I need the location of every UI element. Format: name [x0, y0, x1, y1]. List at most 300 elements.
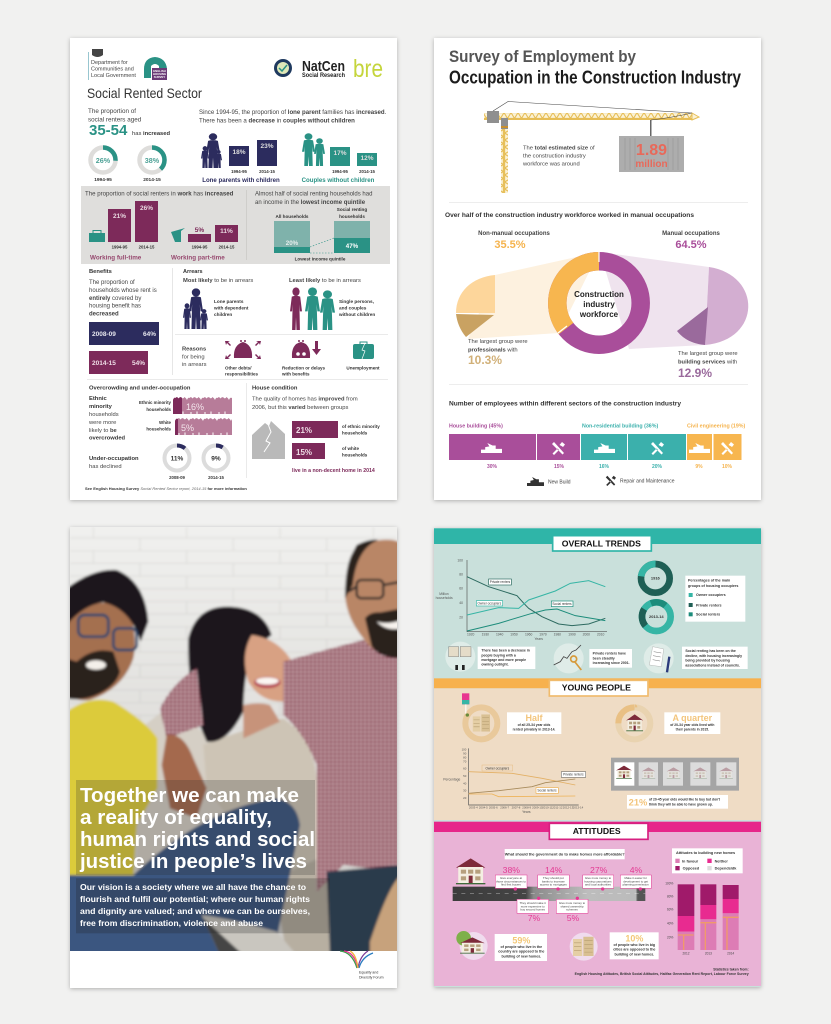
line chart: young people's tenure: Percentage [443, 777, 460, 781]
section: reasons for being in arrears: for being [182, 354, 205, 360]
chart: left fan [456, 252, 599, 339]
vision statement: Our vision is a society where we all have the chance to [80, 882, 306, 892]
line chart: housing tenure trends: households [436, 596, 453, 600]
text: income heading: Almost half of social renting households had [255, 192, 372, 198]
line chart: young people's tenure: 2004-5 [479, 806, 488, 810]
bar chart: lone parents with children: Lone parents with children [202, 177, 280, 184]
bar chart: working part-time: 2014-15 [219, 244, 235, 250]
bar chart: couples without children: 17% [333, 150, 347, 157]
line chart: young people's tenure: 2010-11 [542, 806, 553, 810]
section: benefits: entirely covered by [89, 296, 141, 302]
text: lone parents with dependent children [213, 299, 249, 317]
headline [79, 784, 315, 873]
section: house condition: of ethnic minority [342, 424, 380, 429]
bar chart: couples without children: 1994-95 [332, 169, 348, 174]
line chart: young people's tenure: 2007-8 [512, 806, 521, 810]
callout: owner occupiers decrease [445, 642, 535, 672]
line chart: housing tenure trends: Social renters [552, 602, 572, 606]
stat: 21% would like to buy: 21% [629, 798, 648, 808]
heading: sectors: Number of employees within different sectors of the construction industry [449, 402, 682, 408]
bar chart: lone parents with children: 18% [232, 149, 246, 156]
title [449, 47, 741, 88]
heading: attitudes [549, 823, 648, 839]
stat: half rented privately [462, 693, 561, 739]
chart: income quintile comparison: All households [276, 214, 309, 219]
text: single persons and couples: Single persons, [339, 299, 374, 304]
section: overcrowding and under-occupation: Overcrowding and under-occupation [89, 386, 191, 392]
logo: English Housing Survey: ENGLISH [153, 69, 166, 73]
line chart: housing tenure trends [436, 559, 607, 641]
bar chart: working part-time: Working part-time [171, 254, 225, 262]
icon: lone parent family [183, 288, 208, 329]
road diagram with percentages: Give everyone at [500, 876, 522, 880]
road diagram with percentages: Give more money to [585, 876, 612, 880]
section: arrears [183, 269, 375, 330]
donut chart: 1916: 1916 [651, 576, 661, 581]
segmented bar: sectors: 10% [722, 464, 733, 470]
footer note: See English Housing Survey Social Rented Sector report, 2014-15 for more information [85, 486, 247, 491]
bar chart: lone parents with children: 1994-95 [231, 169, 247, 174]
bar chart: lone parents with children: 2014-15 [259, 169, 275, 174]
section: benefits: 2008-09 [92, 331, 116, 338]
bar chart: couples without children [302, 133, 377, 184]
section: house condition: 2006, but this varied between groups [252, 405, 348, 411]
title: Occupation in the Construction Industry [449, 68, 741, 88]
sources: Statistics taken from: [713, 967, 749, 971]
label: manual: Manual occupations [662, 231, 720, 237]
stat: 59% of country people: building of new homes. [501, 954, 541, 958]
text: workforce size: the construction industry [523, 154, 586, 160]
logo: English Housing Survey [144, 57, 167, 80]
title: Survey of Employment by [449, 47, 636, 66]
donut chart: 9%: 2014-15 [208, 475, 224, 480]
legend: housing occupiers: Owner occupiers [696, 593, 726, 597]
road diagram with percentages: Make it easier for [624, 876, 647, 880]
line chart: housing tenure trends: 1990 [568, 633, 576, 637]
stacked bar chart: attitudes over time: 60% [667, 908, 674, 912]
text: building services: The largest group were [678, 351, 738, 357]
section: benefits: 54% [132, 360, 145, 367]
logo: Department for Communities and Local Government: Department for [91, 60, 128, 66]
callout: owner occupiers decrease: owning outright. [481, 663, 509, 667]
donut chart: 9%: 9% [211, 456, 221, 462]
logo: Equality and Diversity Forum [340, 951, 384, 980]
section: reasons for being in arrears: responsibilities [225, 372, 259, 376]
stacked bar chart: attitudes over time: 80% [667, 894, 674, 898]
band: work and income [81, 186, 390, 264]
section: overall trends [434, 528, 761, 677]
callout: social renting decline: being provided by housing [685, 659, 730, 663]
road diagram with percentages: access to mortgages [540, 883, 567, 887]
legend: housing occupiers [685, 576, 745, 622]
chart: white households crowd: households [146, 426, 172, 432]
segmented bar: sectors: House building (45%) [449, 424, 503, 430]
illustration: tower crane with container [484, 102, 699, 193]
chart: income quintile comparison [274, 207, 370, 262]
donut chart: 38% [140, 148, 164, 183]
heading: overall trends: OVERALL TRENDS [562, 538, 641, 548]
stat: 21% would like to buy: of 20-45 year olds would like to buy but don't [649, 798, 721, 802]
stat: a quarter lived with parents [618, 707, 720, 739]
segmented bar: sectors: 15% [554, 464, 565, 470]
road diagram with percentages: banks to increase [542, 879, 565, 883]
icon: cracked house [252, 421, 285, 459]
title: Social Rented Sector [87, 85, 202, 101]
label: non-manual: 35.5% [494, 239, 526, 251]
section: young people [434, 678, 761, 820]
road diagram with percentages: buy second homes [520, 908, 545, 912]
panel: social rented sector [70, 38, 397, 500]
stat: 21% would like to buy: think they will be able to have grown up. [649, 802, 713, 806]
segmented bar: sectors: Civil engineering (19%) [687, 424, 746, 430]
line chart: young people's tenure: 2009-10 [532, 806, 543, 810]
segmented bar: sectors [449, 424, 746, 470]
illustration: road of houses [611, 758, 739, 791]
callout: social renting decline: Social renting has been on the [685, 649, 736, 653]
section: overcrowding and under-occupation [88, 386, 232, 480]
line chart: housing tenure trends: Years [534, 637, 543, 641]
stacked bar chart: attitudes over time: 40% [667, 922, 674, 926]
illustration: tower crane with container: million [635, 159, 668, 170]
section: house condition: households [342, 430, 368, 436]
line chart: young people's tenure: 2012-13 [563, 806, 574, 810]
stat: half rented privately: of all 25-34 year olds [518, 723, 551, 727]
callout: social renting decline: decline, with housing increasingly [685, 654, 742, 658]
road diagram with percentages: and local authorities [585, 883, 612, 887]
section: reasons for being in arrears [182, 340, 380, 376]
line chart: housing tenure trends: 1920 [467, 633, 475, 637]
legend: attitudes [672, 848, 743, 873]
text: single persons and couples: without children [338, 312, 375, 317]
section: overcrowding and under-occupation: overcrowded [89, 436, 126, 442]
bar chart: couples without children: 12% [360, 155, 374, 162]
text: work heading: The proportion of social renters in work has increased [85, 190, 234, 198]
line chart: housing tenure trends: Private renters [490, 580, 511, 584]
line chart: young people's tenure: Social renters [537, 789, 557, 793]
line chart: young people's tenure: 2008-9 [522, 806, 531, 810]
line chart: young people's tenure: 20 [463, 796, 467, 800]
text: building services: 12.9% [678, 366, 712, 380]
road diagram with percentages: more expensive to [521, 904, 545, 908]
bar chart: working full-time: Working full-time [90, 254, 142, 262]
vision statement: and dignity are valued; and where we can be ourselves, [80, 906, 310, 916]
chart: income quintile comparison: 47% [346, 243, 359, 250]
text: income heading [255, 192, 372, 206]
headline: human rights and social [80, 828, 315, 851]
sources: English Housing Attitudes, British Social Attitudes, Halifax Generation Rent Report, Labour Force Survey [575, 972, 749, 976]
line chart: young people's tenure: 2003-4 [469, 806, 478, 810]
text: single persons and couples [338, 299, 375, 317]
stacked bar chart: attitudes over time: 20% [667, 935, 674, 939]
logo: Equality and Diversity Forum: Diversity Forum [359, 976, 384, 980]
section: overcrowding and under-occupation: Under-occupation [89, 456, 139, 462]
text: workforce size: The total estimated size of [523, 146, 595, 152]
stat: 10% of city people: 10% [625, 933, 643, 943]
text: single persons and couples: and couples [339, 306, 367, 310]
segmented bar: sectors: 30% [487, 464, 498, 470]
section: benefits: 2014-15 [92, 360, 116, 367]
bar chart: lone parents with children [201, 133, 280, 184]
legend: housing occupiers: groups of housing occupiers [688, 584, 738, 588]
line chart: young people's tenure: 2006-7 [500, 806, 509, 810]
stat: a quarter lived with parents: A quarter [673, 713, 713, 723]
sources [575, 967, 749, 976]
bar chart: working full-time: 2014-15 [139, 244, 155, 250]
stacked bar chart: attitudes over time: 2012 [682, 951, 690, 955]
section: house condition: 15% [296, 448, 312, 457]
icon: purse with arrows [225, 340, 261, 359]
section: overcrowding and under-occupation: were more [88, 420, 116, 426]
road diagram with percentages [453, 865, 651, 923]
section: overcrowding and under-occupation: Ethnic [89, 396, 107, 402]
label: non-manual [478, 231, 550, 251]
text: lone parents intro: Since 1994-95, the proportion of lone parent families has increased. [199, 109, 387, 116]
bar chart: working part-time: 11% [220, 228, 233, 235]
illustration: house on road [456, 858, 485, 884]
stat: 35-54 age group: social renters aged [88, 116, 142, 124]
stat: 35-54 age group: The proportion of [88, 108, 136, 115]
icon: broken briefcase [353, 342, 374, 359]
line chart: housing tenure trends: 2010 [597, 633, 605, 637]
bar chart: couples without children: 2014-15 [359, 169, 375, 174]
stat: 59% of country people: of people who live in the [501, 945, 542, 949]
logo: NatCen Social Research and bre: bre [353, 55, 383, 83]
legend: attitudes: Attitudes to building new homes [676, 851, 735, 855]
text: lone parents intro [199, 109, 387, 124]
legend [527, 476, 675, 486]
chart: white households crowd [146, 417, 232, 435]
line chart: housing tenure trends: 1980 [554, 633, 561, 637]
donut chart: construction industry workforce [557, 251, 641, 345]
section: reasons for being in arrears: with benefits [281, 372, 310, 376]
donut chart: 1916 [639, 562, 672, 595]
bar chart: working part-time: 1994-95 [192, 244, 208, 250]
headline: justice in people’s lives [79, 850, 307, 873]
road diagram with percentages: 7% [528, 913, 541, 923]
donut chart: 26%: 1994-95 [94, 177, 112, 183]
line chart: young people's tenure: 30 [463, 789, 467, 793]
section: benefits: households whose rent is [89, 288, 157, 294]
line chart: young people's tenure: Owner occupiers [485, 766, 510, 770]
line chart: housing tenure trends: 1960 [525, 633, 533, 637]
bar chart: working part-time: 5% [195, 227, 204, 234]
donut chart: construction industry workforce: Construction [574, 290, 624, 299]
callout: owner occupiers decrease: people buying with a [481, 653, 516, 657]
line chart: young people's tenure: 2013-14 [573, 806, 584, 810]
donut chart: 11%: 11% [171, 456, 184, 462]
road diagram with percentages: 27% [590, 865, 608, 875]
line chart: young people's tenure: 90 [463, 751, 467, 755]
section: reasons for being in arrears: Reduction or delays [282, 366, 326, 370]
chart: ethnic minority households crowd: households [146, 407, 172, 412]
stacked bar chart: attitudes over time: 2013 [705, 951, 712, 955]
stat: 35-54 age group [88, 108, 170, 139]
line chart: housing tenure trends: 1930 [482, 633, 489, 637]
chart: ethnic minority households crowd: 16% [186, 402, 204, 412]
logo: NatCen Social Research and bre [274, 55, 383, 83]
segmented bar: sectors: 9% [695, 464, 703, 470]
segmented bar: sectors: 16% [599, 464, 610, 470]
chart: right fan [600, 252, 748, 349]
text: lone parents with dependent children: children [214, 312, 232, 317]
section: arrears: Most likely to be in arrears [183, 278, 253, 284]
road diagram with percentages: planning permission [623, 883, 649, 887]
legend: attitudes: Neither [715, 859, 728, 863]
legend: attitudes: In favour [682, 859, 699, 863]
stat: 10% of city people: cities are opposed to the [613, 948, 655, 952]
road diagram with percentages: schemes [566, 908, 578, 912]
section: overcrowding and under-occupation: households [89, 412, 119, 418]
line chart: young people's tenure: 60 [463, 767, 467, 771]
line chart: housing tenure trends: 40 [459, 601, 463, 605]
headline: a reality of equality, [80, 806, 272, 829]
section: overcrowding and under-occupation: likely to be [89, 428, 117, 434]
stat: half rented privately: Half [526, 713, 543, 723]
section: arrears: Arrears [183, 269, 203, 275]
callout: private renters increase: been steadily [593, 656, 615, 660]
panel: housing infographic [434, 528, 761, 987]
section: house condition: live in a non-decent home in 2014 [292, 468, 375, 474]
donut chart: construction industry workforce: industry [583, 300, 615, 309]
legend: Repair and Maintenance [620, 478, 675, 484]
label: non-manual: Non-manual occupations [478, 231, 550, 237]
section: house condition: House condition [252, 386, 298, 392]
section: benefits: The proportion of [89, 280, 135, 286]
chart: income quintile comparison: 20% [286, 240, 299, 247]
headline: Together we can make [80, 784, 299, 807]
stat: 59% of country people [456, 931, 547, 961]
bar chart: working full-time [89, 201, 158, 262]
chart: income quintile comparison: households [339, 214, 365, 219]
vision statement [80, 882, 310, 928]
text: professionals: 10.3% [468, 353, 502, 367]
chart: income quintile comparison: Social renting [337, 207, 367, 212]
section: benefits [89, 269, 159, 374]
label: manual [662, 231, 720, 251]
line chart: young people's tenure: 2005-6 [489, 806, 498, 810]
chart: ethnic minority households crowd [139, 396, 232, 414]
line chart: housing tenure trends: 1950 [510, 633, 518, 637]
line chart: young people's tenure [443, 747, 586, 814]
section: reasons for being in arrears: Reasons [182, 346, 206, 352]
donut chart: 26% [90, 148, 116, 183]
vision statement: flourish and fulfil our potential; where our human rights [80, 894, 310, 904]
section: house condition: of white [342, 446, 359, 451]
stacked bar chart: attitudes over time: 2014 [727, 951, 734, 955]
stat: 35-54 age group: 35-54 [89, 122, 128, 139]
logo: English Housing Survey: HOUSING [153, 72, 166, 76]
road diagram with percentages: They should make it [520, 901, 546, 905]
stat: half rented privately: rented privately in 2013-14. [513, 727, 555, 731]
text: building services: building services with [678, 360, 737, 366]
logo: NatCen Social Research and bre: Social Research [302, 72, 345, 79]
stat: a quarter lived with parents: of 20-34 year olds lived with [670, 723, 714, 727]
text: income heading: an income in the lowest income quintile [255, 200, 366, 206]
section: overcrowding and under-occupation: minority [89, 404, 113, 410]
section: house condition: The quality of homes has improved from [252, 396, 358, 402]
line chart: young people's tenure: 2011-12 [552, 806, 563, 810]
road diagram with percentages: They should put [543, 876, 564, 880]
line chart: housing tenure trends: 80 [459, 572, 463, 576]
question [505, 849, 625, 859]
heading: manual occupations: Over half of the construction industry workforce worked in manual occupations [445, 213, 695, 219]
bar chart: lone parents with children: 23% [260, 143, 274, 150]
bar chart: couples without children: Couples without children [302, 177, 375, 184]
text: building services [678, 351, 738, 380]
heading: overall trends [553, 536, 651, 551]
section: reasons for being in arrears: Unemployment [346, 366, 380, 370]
stat: 10% of city people [570, 932, 659, 961]
donut chart: 2013-14: 2013-14 [649, 614, 664, 619]
legend: attitudes: Opposed [683, 867, 700, 871]
stacked bar chart: attitudes over time [665, 881, 739, 955]
line chart: housing tenure trends: 60 [459, 587, 463, 591]
icon: single persons and couples [290, 287, 335, 330]
callout: private renters increase: increasing since 2001. [593, 661, 630, 665]
chart: white households crowd: White [159, 420, 172, 425]
line chart: young people's tenure: 70 [463, 759, 467, 763]
section: attitudes [434, 822, 761, 986]
chart: white households crowd: 5% [181, 423, 194, 433]
logo: English Housing Survey: SURVEY [154, 75, 165, 79]
section: benefits: decreased [89, 312, 119, 318]
vision statement: free from discrimination, violence and abuse [80, 918, 263, 928]
road diagram with percentages: Give more money to [559, 901, 586, 905]
illustration: tower crane with container: 1.89 [636, 142, 667, 159]
heading: attitudes: ATTITUDES [573, 826, 621, 836]
section: benefits: 64% [143, 331, 156, 338]
road diagram with percentages: 38% [503, 865, 520, 875]
heading: young people [549, 680, 648, 696]
line chart: young people's tenure: Private renters [563, 773, 584, 777]
stat: 10% of city people: building of new homes. [614, 952, 654, 956]
road diagram with percentages: find first buyers [501, 883, 521, 887]
chart: ethnic minority households crowd: Ethnic minority [139, 400, 172, 405]
text: lone parents with dependent children: Lone parents [214, 299, 244, 304]
line chart: housing tenure trends: 1940 [496, 633, 504, 637]
road diagram with percentages: development to get [623, 879, 648, 883]
question: What should the government do to make homes more affordable? [505, 853, 625, 857]
section: house condition: 21% [296, 426, 312, 435]
road diagram with percentages: 5% [567, 913, 580, 923]
line chart: young people's tenure: 80 [463, 755, 467, 759]
text: professionals [468, 339, 528, 367]
legend: housing occupiers: Social renters [696, 613, 720, 617]
callout: owner occupiers decrease: mortgage and more people [481, 658, 526, 662]
callout: social renting decline: associations instead of councils. [685, 663, 740, 667]
text: workforce size [522, 146, 595, 168]
road diagram with percentages: 14% [545, 865, 563, 875]
donut chart: 9% [204, 446, 228, 480]
line chart: housing tenure trends: 2000 [583, 633, 590, 637]
stat: 21% would like to buy [627, 795, 728, 809]
section: overcrowding and under-occupation: has declined [89, 464, 122, 470]
text: workforce size: workforce was around [522, 162, 580, 168]
callout: owner occupiers decrease: There has been a decrease in [481, 649, 530, 653]
donut chart: construction industry workforce: workforce [579, 310, 619, 319]
panel: equality and diversity photo [63, 518, 403, 988]
logo: Equality and Diversity Forum: Equality and [359, 970, 378, 974]
line chart: young people's tenure: 40 [463, 781, 467, 785]
callout: private renters increase [554, 643, 632, 673]
section: benefits: Benefits [89, 269, 112, 275]
line chart: housing tenure trends: 1970 [539, 633, 547, 637]
callout: social renting decline [644, 643, 748, 673]
road diagram with percentages: 4% [630, 865, 643, 875]
legend: housing occupiers: Private renters [696, 603, 722, 607]
segmented bar: sectors: 20% [652, 464, 663, 470]
stat: 59% of country people: country are opposed to the [498, 950, 544, 954]
